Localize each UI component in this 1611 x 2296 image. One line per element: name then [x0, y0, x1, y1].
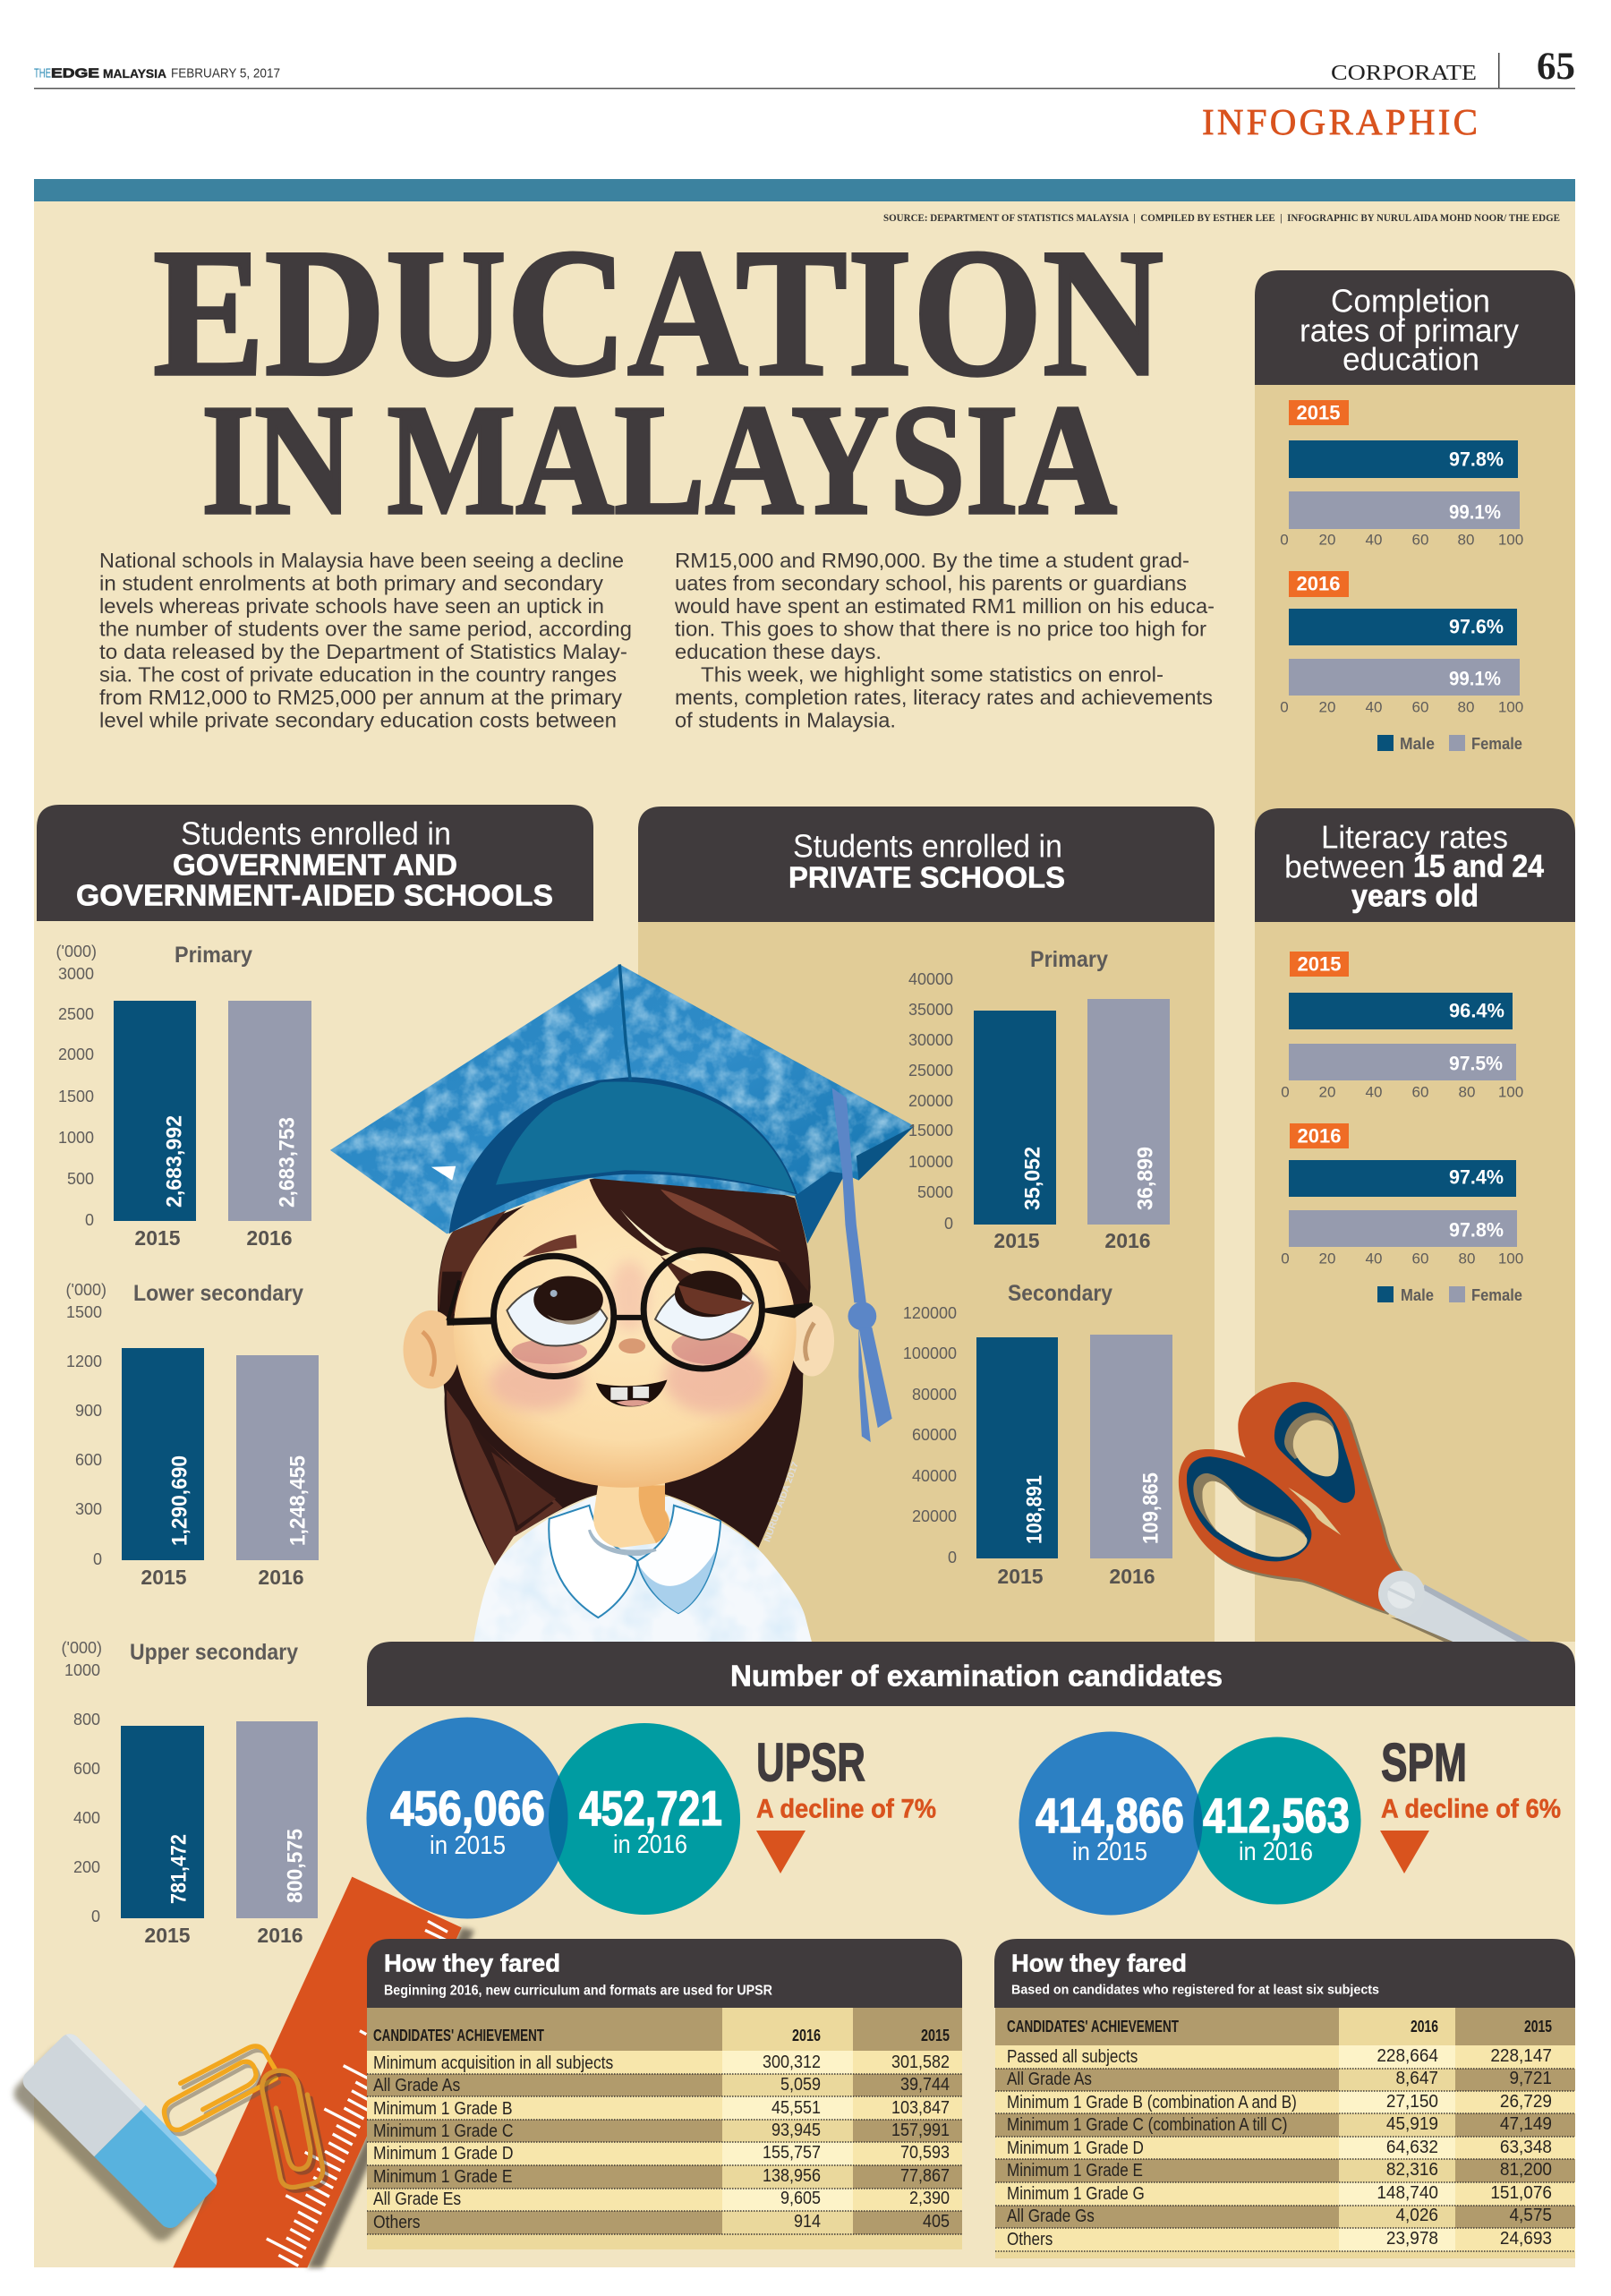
bar chart: government lower secondary: 300	[75, 1500, 102, 1518]
scissors shadow	[1183, 1386, 1405, 1615]
table column 2016: 27,150	[1386, 2092, 1438, 2112]
intro text column 2	[674, 549, 1215, 732]
title	[153, 211, 1164, 548]
bar chart: private primary: 0	[944, 1215, 953, 1233]
table column 2015: 26,729	[1500, 2092, 1552, 2112]
bar chart: government lower secondary: 600	[75, 1451, 102, 1469]
bar chart: government lower secondary	[66, 1281, 319, 1589]
bar chart: government lower secondary: 1500	[66, 1303, 102, 1321]
figure: 412,563 in 2016: 412,563	[1203, 1788, 1350, 1843]
heading: literacy rates: years old	[1351, 879, 1479, 913]
bar chart: government primary: 3000	[58, 965, 94, 983]
table column 2016: 914	[794, 2212, 821, 2232]
scissors blade	[1390, 1584, 1531, 1642]
table column 2015: 151,076	[1490, 2183, 1552, 2203]
heading: number of examination candidates: Number of examination candidates	[730, 1660, 1223, 1692]
heading: government schools: GOVERNMENT AND	[173, 849, 457, 881]
figure: 456,066 in 2015	[390, 1780, 545, 1860]
bar chart: government primary: 1500	[58, 1088, 94, 1105]
table column 2016: 64,632	[1386, 2138, 1438, 2157]
arrow: decline down	[756, 1831, 806, 1874]
legend: literacy	[1377, 1286, 1522, 1304]
teal top band	[34, 179, 1575, 201]
bar chart: government upper secondary: ('000)	[62, 1639, 102, 1657]
table header labels: CANDIDATES' ACHIEVEMENT	[1007, 2018, 1179, 2036]
figure: 452,721 in 2016	[579, 1780, 722, 1859]
table header labels: CANDIDATES' ACHIEVEMENT	[373, 2027, 544, 2044]
bar chart: private secondary: 108,891	[1022, 1475, 1047, 1544]
bar chart: government lower secondary: 1,290,690	[168, 1455, 192, 1546]
chart title: lower secondary: Lower secondary	[133, 1281, 303, 1306]
table column 2015: 4,575	[1509, 2206, 1552, 2225]
shirt	[473, 1497, 812, 1643]
figure: 456,066 in 2015: 456,066	[390, 1780, 545, 1836]
table labels: All Grade Gs	[1007, 2206, 1095, 2225]
bar chart: literacy 2016: 0	[1281, 1250, 1290, 1267]
bar chart: literacy 2016: 97.4%	[1449, 1165, 1504, 1189]
table column 2015: 301,582	[891, 2053, 950, 2072]
illustration: scissors	[1179, 1382, 1531, 1642]
table labels: Minimum 1 Grade C	[373, 2121, 513, 2140]
table column 2015: 24,693	[1500, 2229, 1552, 2249]
table column 2016: 45,551	[771, 2098, 821, 2118]
bar chart: private secondary: 40000	[912, 1467, 957, 1485]
table column 2015: 47,149	[1500, 2114, 1552, 2134]
legend: literacy: Male	[1401, 1286, 1434, 1304]
arrow: decline down	[1380, 1831, 1429, 1874]
intro text column 2: education these days.	[675, 640, 882, 663]
bar chart: private primary: 15000	[908, 1122, 953, 1139]
bar chart: private secondary: 100000	[903, 1344, 957, 1362]
table column 2015: 228,147	[1490, 2046, 1552, 2066]
bar chart: government primary: 2,683,992	[163, 1115, 186, 1208]
bar chart: literacy 2016: 100	[1498, 1250, 1523, 1267]
chart title: primary: Primary	[1030, 947, 1108, 972]
figure: 414,866 in 2015: in 2015	[1072, 1838, 1147, 1866]
nose and mouth	[596, 1338, 667, 1406]
intro text column 2: RM15,000 and RM90,000. By the time a student grad-	[675, 549, 1189, 572]
masthead: FEBRUARY 5, 2017	[171, 66, 280, 81]
table heading	[994, 1939, 1575, 2008]
heading: government schools: Students enrolled in	[181, 815, 451, 852]
bar chart: literacy 2016: 97.8%	[1449, 1219, 1504, 1241]
heading: completion rates: education	[1342, 340, 1479, 378]
chart title: upper secondary: Upper secondary	[130, 1640, 298, 1665]
scissors pivot	[1378, 1571, 1425, 1617]
label: SPM decline	[1380, 1733, 1561, 1874]
intro text column 2: uates from secondary school, his parents or guardians	[675, 571, 1187, 594]
bar chart: private secondary: 2016	[1109, 1565, 1155, 1588]
bar chart: literacy 2015: 80	[1459, 1083, 1475, 1101]
legend: completion: Male	[1400, 735, 1435, 753]
right tan column	[1255, 385, 1575, 1642]
bar chart: government lower secondary: 0	[93, 1550, 102, 1568]
heading: literacy rates	[1255, 808, 1575, 922]
figure: 412,563 in 2016: in 2016	[1239, 1838, 1313, 1866]
circles: UPSR candidates	[367, 1717, 740, 1919]
masthead: THE	[34, 66, 51, 81]
legend: completion	[1377, 735, 1522, 753]
bar chart: private secondary	[903, 1281, 1172, 1588]
table heading: How they fared	[384, 1950, 560, 1976]
bar chart: government primary: 1000	[58, 1129, 94, 1147]
table header labels	[373, 2027, 950, 2044]
table labels: Passed all subjects	[1007, 2046, 1138, 2066]
table header labels: 2015	[1524, 2018, 1552, 2036]
bar chart: literacy 2015: 100	[1498, 1083, 1523, 1101]
heading: government schools	[37, 805, 593, 921]
bar chart: government primary: 2500	[58, 1005, 94, 1023]
chart title: secondary: Secondary	[1008, 1281, 1112, 1306]
label: SPM decline: A decline of 6%	[1381, 1794, 1561, 1824]
table column 2015: 9,721	[1509, 2069, 1552, 2088]
table column 2015	[891, 2053, 950, 2232]
bar chart: government upper secondary: 800	[73, 1711, 100, 1728]
bar chart: private primary: 30000	[908, 1031, 953, 1049]
ears	[404, 1305, 834, 1388]
bar chart: government primary: 0	[85, 1211, 94, 1229]
bar chart: completion 2015: 97.8%	[1449, 448, 1504, 471]
section label: infographic: INFOGRAPHIC	[1202, 101, 1478, 142]
bar chart: completion 2015: 99.1%	[1449, 501, 1501, 523]
chart title: primary: Primary	[175, 943, 252, 968]
masthead	[34, 46, 1575, 90]
table labels: All Grade Es	[373, 2189, 461, 2208]
bar chart: government upper secondary: 2016	[257, 1924, 303, 1947]
artist signature: NURUL AIDA 2017	[763, 1460, 801, 1543]
paper clip 2	[262, 2070, 327, 2191]
heading: private schools	[638, 807, 1215, 922]
bar chart: literacy 2015: 40	[1366, 1083, 1382, 1101]
table column 2016: 9,605	[780, 2189, 821, 2208]
bar chart: literacy 2016: 2016	[1298, 1124, 1341, 1148]
face	[454, 1176, 797, 1488]
bar chart: government primary: 2015	[134, 1226, 181, 1250]
table column 2016: 23,978	[1386, 2229, 1438, 2249]
table column 2015	[1490, 2046, 1552, 2249]
bar chart: government upper secondary	[62, 1639, 318, 1947]
figure: 452,721 in 2016: in 2016	[613, 1831, 687, 1859]
graduation cap	[330, 964, 915, 1243]
bar chart: completion 2015: 60	[1412, 532, 1428, 548]
table column 2016: 138,956	[763, 2166, 821, 2186]
table background rows	[995, 2008, 1575, 2258]
table: SPM how they fared	[994, 1939, 1575, 2258]
table header labels: 2016	[1411, 2018, 1438, 2036]
bar chart: private secondary: 109,865	[1138, 1472, 1164, 1544]
bar chart: completion 2016: 20	[1319, 698, 1335, 716]
intro text column 1: levels whereas private schools have seen an uptick in	[99, 594, 604, 618]
table column 2015: 103,847	[891, 2098, 950, 2118]
scissors handle	[1179, 1382, 1401, 1611]
table column 2016: 228,664	[1377, 2046, 1438, 2066]
table column 2016: 45,919	[1386, 2114, 1438, 2134]
masthead: EDGE	[51, 66, 99, 81]
table labels	[373, 2053, 613, 2232]
bar chart: government lower secondary: 1200	[66, 1353, 102, 1370]
bar chart: private secondary: 60000	[912, 1426, 957, 1444]
intro text column 2: This week, we highlight some statistics on enrol-	[701, 662, 1164, 686]
heading: completion rates: Completion	[1331, 283, 1490, 319]
figure: 414,866 in 2015: 414,866	[1036, 1788, 1184, 1843]
figure: 412,563 in 2016	[1203, 1788, 1350, 1866]
intro text column 2: tion. This goes to show that there is no price too high for	[675, 618, 1206, 641]
table labels: Minimum acquisition in all subjects	[373, 2053, 613, 2072]
bar chart: private primary: 40000	[908, 970, 953, 988]
figure: 414,866 in 2015	[1036, 1788, 1184, 1866]
eyes	[507, 1271, 753, 1345]
table labels: All Grade As	[373, 2075, 460, 2095]
table column 2015: 157,991	[891, 2121, 950, 2140]
illustration: paper clips	[164, 2046, 327, 2191]
table column 2016	[1377, 2046, 1438, 2249]
circles: SPM candidates	[1019, 1731, 1360, 1916]
table column 2015: 77,867	[900, 2166, 950, 2186]
bar chart: government lower secondary: 2015	[141, 1566, 187, 1589]
bar chart: literacy 2015	[1281, 952, 1523, 1101]
bar chart: literacy 2015: 0	[1281, 1083, 1290, 1101]
bar chart: literacy 2015: 96.4%	[1449, 999, 1504, 1022]
panel: completion rates of primary education	[1255, 270, 1575, 753]
bar chart: private secondary: 20000	[912, 1507, 957, 1525]
bar chart: private primary: 10000	[908, 1153, 953, 1171]
label: SPM decline: SPM	[1381, 1733, 1467, 1792]
bar chart: completion 2015: 20	[1319, 532, 1335, 548]
bar chart: government primary: 500	[67, 1170, 94, 1188]
table header labels: 2015	[921, 2027, 950, 2044]
bar chart: government upper secondary: 0	[91, 1908, 100, 1925]
hair	[438, 1181, 811, 1566]
title: IN MALAYSIA	[201, 372, 1117, 548]
heading: literacy rates: 15 and 24	[1413, 849, 1544, 884]
bar chart: literacy 2016: 20	[1319, 1250, 1335, 1267]
intro text column 1: sia. The cost of private education in the country ranges	[99, 662, 617, 686]
table heading: Beginning 2016, new curriculum and formats are used for UPSR	[384, 1984, 772, 1998]
table labels: Others	[373, 2212, 421, 2232]
table column 2015: 39,744	[900, 2075, 950, 2095]
table column 2016: 93,945	[771, 2121, 821, 2140]
table column 2015: 70,593	[900, 2143, 950, 2163]
bar chart: literacy 2015: 97.5%	[1449, 1053, 1503, 1074]
panel: literacy rates	[1255, 808, 1575, 1304]
bar chart: private primary: 35,052	[1020, 1147, 1045, 1210]
intro text column 1: from RM12,000 to RM25,000 per annum at the primary	[99, 686, 623, 709]
bar chart: government upper secondary: 2015	[144, 1924, 191, 1947]
table labels: All Grade As	[1007, 2069, 1092, 2088]
bar chart: private secondary: 0	[948, 1549, 957, 1566]
intro text column 1: level while private secondary education costs between	[99, 709, 617, 732]
masthead: CORPORATE	[1331, 62, 1477, 85]
table labels: Others	[1007, 2229, 1053, 2249]
bar chart: literacy 2016: 40	[1366, 1250, 1382, 1267]
table labels	[1007, 2046, 1297, 2249]
bar chart: private primary	[908, 947, 1170, 1252]
table: UPSR how they fared	[367, 1939, 962, 2249]
title: EDUCATION	[153, 211, 1164, 414]
table column 2016: 300,312	[763, 2053, 821, 2072]
table labels: Minimum 1 Grade E	[373, 2166, 513, 2186]
bar chart: literacy 2016	[1281, 1123, 1523, 1267]
table header labels	[1007, 2018, 1552, 2036]
bar chart: completion 2015: 80	[1458, 532, 1474, 548]
bar chart: private primary: 2016	[1104, 1229, 1151, 1252]
bar chart: private secondary: 80000	[912, 1386, 957, 1404]
bar chart: government primary: 2016	[246, 1226, 293, 1250]
table column 2016: 5,059	[780, 2075, 821, 2095]
table column 2016	[763, 2053, 821, 2232]
bar chart: private primary: 20000	[908, 1092, 953, 1110]
intro text column 1: National schools in Malaysia have been seeing a decline	[99, 549, 624, 572]
bar chart: literacy 2016: 60	[1412, 1250, 1428, 1267]
intro text column 1	[99, 549, 632, 732]
handle grips	[1187, 1402, 1355, 1564]
tassel	[832, 1088, 892, 1442]
table heading	[367, 1939, 962, 2008]
ruler	[173, 1877, 474, 2267]
bar chart: completion 2015	[1280, 400, 1523, 548]
label: UPSR decline	[756, 1733, 936, 1874]
bar chart: government primary: 2,683,753	[276, 1117, 299, 1208]
heading: private schools: Students enrolled in	[793, 827, 1062, 865]
bar chart: completion 2016: 80	[1458, 698, 1474, 716]
bar chart: literacy 2015: 60	[1412, 1083, 1428, 1101]
bar chart: completion 2015: 100	[1498, 532, 1523, 548]
bar chart: government primary: ('000)	[56, 943, 97, 960]
table labels: Minimum 1 Grade C (combination A till C)	[1007, 2114, 1287, 2134]
table header labels: 2016	[792, 2027, 821, 2044]
table column 2015: 405	[923, 2212, 950, 2232]
table column 2016: 8,647	[1395, 2069, 1438, 2088]
table column 2015: 63,348	[1500, 2138, 1552, 2157]
bar chart: government upper secondary: 400	[73, 1809, 100, 1827]
heading: literacy rates: Literacy rates	[1321, 818, 1508, 856]
bar chart: completion 2016: 99.1%	[1449, 668, 1501, 689]
bar chart: literacy 2015: 2015	[1298, 952, 1341, 976]
table heading: How they fared	[1011, 1950, 1187, 1976]
figure: 452,721 in 2016: 452,721	[579, 1780, 722, 1836]
masthead: MALAYSIA	[103, 66, 166, 81]
bar chart: completion 2016: 97.6%	[1449, 616, 1504, 637]
label: UPSR decline: UPSR	[756, 1733, 865, 1792]
illustration: eraser	[9, 2029, 222, 2246]
bar chart: literacy 2015: 20	[1319, 1083, 1335, 1101]
paper clip 1	[164, 2046, 279, 2134]
table labels: Minimum 1 Grade B	[373, 2098, 513, 2118]
bar chart: completion 2015: 2015	[1297, 401, 1340, 424]
bar chart: private primary: 5000	[917, 1183, 953, 1201]
heading: completion rates	[1255, 270, 1575, 385]
bar chart: government lower secondary: 900	[75, 1402, 102, 1420]
masthead: 65	[1537, 46, 1575, 88]
bar chart: private primary: 25000	[908, 1062, 953, 1080]
bar chart: private primary: 36,899	[1133, 1147, 1158, 1210]
bar chart: completion 2016: 100	[1498, 698, 1523, 716]
bar chart: government upper secondary: 781,472	[166, 1834, 192, 1904]
table column 2016: 148,740	[1377, 2183, 1438, 2203]
illustration: student with graduation cap	[330, 964, 915, 1643]
legend: literacy: Female	[1471, 1286, 1522, 1304]
bar chart: government primary	[56, 943, 311, 1250]
intro text column 1: to data released by the Department of Statistics Malay-	[99, 640, 627, 663]
table labels: Minimum 1 Grade E	[1007, 2160, 1143, 2180]
intro text column 1: the number of students over the same period, according	[99, 618, 632, 641]
bar chart: private primary: 35000	[908, 1001, 953, 1019]
bar chart: completion 2016: 60	[1412, 698, 1428, 716]
table column 2015: 81,200	[1500, 2160, 1552, 2180]
table column 2016: 4,026	[1395, 2206, 1438, 2225]
label: UPSR decline: A decline of 7%	[756, 1794, 936, 1824]
heading: government schools: GOVERNMENT-AIDED SCHOOLS	[76, 879, 553, 911]
ruler ticks	[267, 1921, 448, 2266]
table column 2015: 2,390	[909, 2189, 950, 2208]
table labels: Minimum 1 Grade D	[1007, 2138, 1144, 2157]
bar chart: government lower secondary: ('000)	[66, 1281, 107, 1299]
bar chart: literacy 2016: 80	[1459, 1250, 1475, 1267]
table column 2016: 155,757	[763, 2143, 821, 2163]
bar chart: government lower secondary: 2016	[258, 1566, 304, 1589]
bar chart: private primary: 2015	[993, 1229, 1040, 1252]
table background rows	[367, 2008, 962, 2249]
heading: private schools: PRIVATE SCHOOLS	[788, 861, 1065, 893]
intro text column 2: would have spent an estimated RM1 million on his educa-	[674, 594, 1215, 618]
bar chart: government upper secondary: 600	[73, 1760, 100, 1778]
bar chart: private secondary: 2015	[997, 1565, 1044, 1588]
figure: 456,066 in 2015: in 2015	[430, 1831, 506, 1860]
bar chart: government upper secondary: 1000	[64, 1661, 100, 1679]
intro text column 1: in student enrolments at both primary and secondary	[99, 571, 604, 594]
bar chart: completion 2016: 2016	[1297, 573, 1340, 594]
table heading: Based on candidates who registered for at least six subjects	[1011, 1982, 1379, 1998]
table labels: Minimum 1 Grade D	[373, 2143, 513, 2163]
private schools tan panel	[638, 922, 1215, 1642]
intro text column 2: of students in Malaysia.	[675, 709, 896, 732]
glasses	[447, 1250, 812, 1377]
fringe	[523, 1174, 809, 1303]
heading: number of examination candidates	[367, 1642, 1575, 1706]
table labels: Minimum 1 Grade B (combination A and B)	[1007, 2092, 1297, 2112]
heading: literacy rates: between	[1284, 849, 1405, 884]
neck	[589, 1483, 669, 1555]
bar chart: government primary: 2000	[58, 1046, 94, 1063]
bar chart: completion 2016: 40	[1366, 698, 1382, 716]
bar chart: completion 2016	[1280, 571, 1523, 716]
bar chart: government upper secondary: 800,575	[283, 1829, 308, 1903]
table labels: Minimum 1 Grade G	[1007, 2183, 1145, 2203]
bar chart: government upper secondary: 200	[73, 1858, 100, 1876]
heading: completion rates: rates of primary	[1300, 312, 1519, 349]
bar chart: government lower secondary: 1,248,455	[286, 1455, 310, 1546]
bar chart: completion 2015: 0	[1280, 532, 1289, 548]
bar chart: completion 2016: 0	[1280, 698, 1289, 716]
source line: SOURCE: DEPARTMENT OF STATISTICS MALAYSIA | COMPILED BY ESTHER LEE | INFOGRAPHIC BY NURUL AIDA MOHD NOOR/ THE EDGE	[883, 213, 1560, 224]
bar chart: private secondary: 120000	[903, 1304, 957, 1322]
table column 2016: 82,316	[1386, 2160, 1438, 2180]
legend: completion: Female	[1471, 735, 1522, 753]
intro text column 2: ments, completion rates, literacy rates and achievements	[675, 686, 1213, 709]
bar chart: completion 2015: 40	[1366, 532, 1382, 548]
